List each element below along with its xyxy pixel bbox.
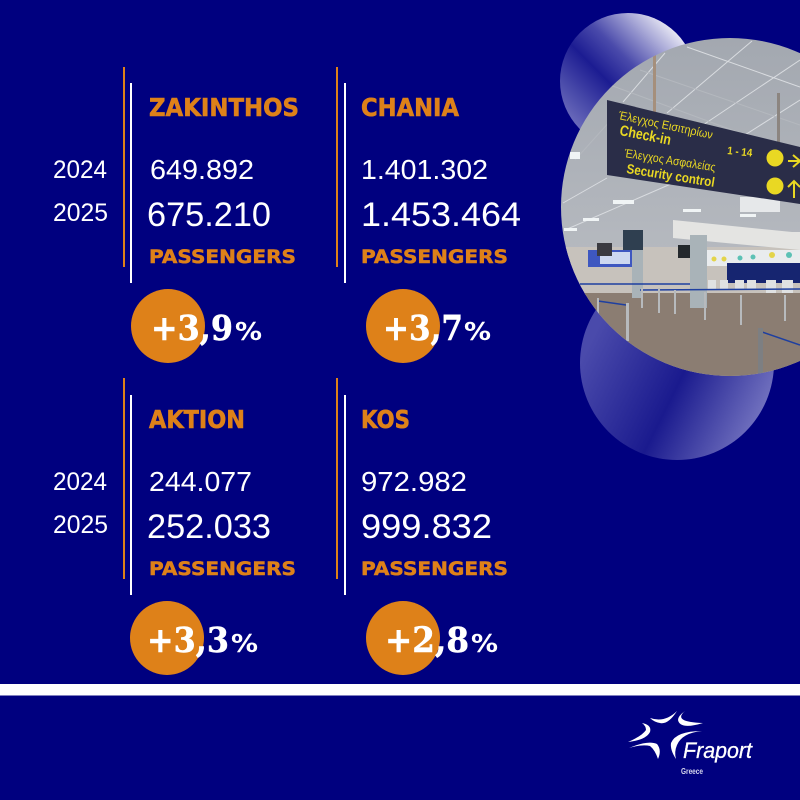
airport photo: Έλεγχος Εισιτηρίων bbox=[616, 108, 714, 142]
airport photo bbox=[560, 38, 800, 378]
label: passengers: PASSENGERS bbox=[361, 558, 508, 580]
heading: Kos: KOS bbox=[361, 405, 410, 434]
badge: +3,7% bbox=[366, 289, 491, 363]
panel: Aktion bbox=[53, 378, 296, 675]
label: passengers: PASSENGERS bbox=[149, 246, 296, 268]
value 2024: 649.892 bbox=[150, 154, 254, 185]
airport photo: columns bbox=[632, 235, 707, 308]
airport photo: Check-in bbox=[618, 122, 673, 149]
Fraport Greece logo bbox=[628, 711, 753, 776]
airport photo: check-in desks bbox=[708, 280, 793, 293]
logo wordmark: Fraport bbox=[683, 738, 753, 763]
badge: +3,9% bbox=[131, 289, 262, 363]
badge: +3,7%: % bbox=[464, 317, 491, 346]
value 2025: 999.832 bbox=[361, 508, 492, 546]
badge: +3,9%: +3,9 bbox=[151, 308, 233, 349]
footer band bbox=[0, 684, 800, 696]
value 2025: 1.453.464 bbox=[361, 196, 521, 234]
badge: +2,8% bbox=[366, 601, 498, 675]
badge: +3,3% bbox=[130, 601, 258, 675]
airport photo: queue barriers bbox=[580, 284, 800, 345]
heading: Zakinthos: ZAKINTHOS bbox=[149, 93, 299, 122]
decorative circle: top bbox=[560, 13, 696, 149]
airport photo: overhead sign bbox=[607, 100, 800, 204]
badge: +2,8%: +2,8 bbox=[385, 620, 469, 661]
decorative circle: bottom bbox=[580, 266, 774, 460]
year 2024: 2024 bbox=[53, 468, 107, 496]
airport photo: Έλεγχος Ασφαλείας bbox=[623, 146, 717, 174]
badge: +3,3%: % bbox=[231, 629, 258, 658]
label: passengers: PASSENGERS bbox=[149, 558, 296, 580]
panel: Kos bbox=[336, 378, 508, 675]
airport photo: Security control bbox=[626, 161, 716, 190]
panel: Chania bbox=[336, 67, 521, 363]
value 2024: 1.401.302 bbox=[361, 154, 488, 185]
year 2025: 2025 bbox=[53, 199, 108, 227]
airport photo: 1 - 14 bbox=[727, 145, 754, 160]
panel: Zakinthos bbox=[53, 67, 299, 363]
label: passengers: PASSENGERS bbox=[361, 246, 508, 268]
value 2025: 252.033 bbox=[147, 508, 271, 546]
value 2025: 675.210 bbox=[147, 196, 271, 234]
year 2025: 2025 bbox=[53, 511, 108, 539]
value 2024: 244.077 bbox=[149, 466, 252, 497]
heading: Aktion: AKTION bbox=[149, 405, 245, 434]
badge: +3,7%: +3,7 bbox=[383, 308, 463, 349]
value 2024: 972.982 bbox=[361, 466, 467, 497]
logo subtitle: Greece bbox=[681, 767, 703, 776]
badge: +3,3%: +3,3 bbox=[147, 620, 229, 661]
badge: +3,9%: % bbox=[235, 317, 262, 346]
heading: Chania: CHANIA bbox=[361, 93, 460, 122]
badge: +2,8%: % bbox=[471, 629, 498, 658]
year 2024: 2024 bbox=[53, 156, 107, 184]
